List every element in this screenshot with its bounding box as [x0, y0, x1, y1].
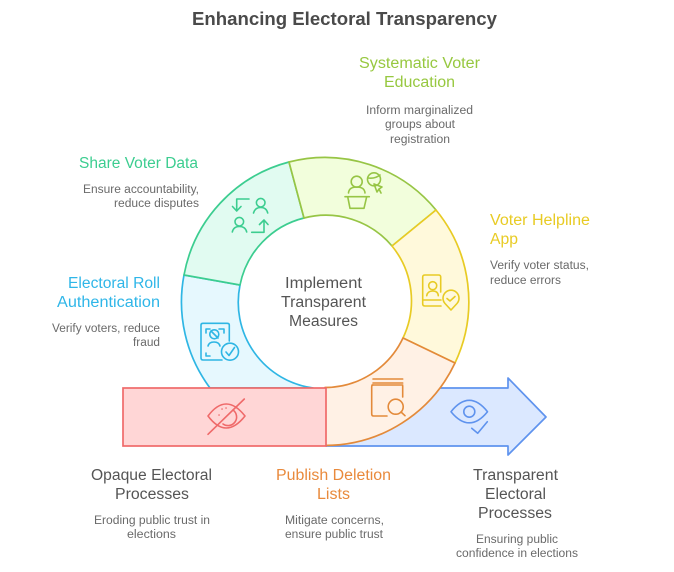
text block: transparent electoral processes: [456, 467, 578, 560]
text block: opaque electoral processes: [91, 467, 212, 541]
segment: voter helpline app: [392, 210, 469, 363]
text block: electoral roll authentication: Authentication: [57, 294, 160, 311]
center label: Implement: [285, 275, 363, 292]
text block: opaque electoral processes: Eroding public trust in: [94, 515, 210, 527]
center label: [281, 275, 367, 330]
panel: opaque processes: [123, 388, 326, 446]
segment: electoral roll authentication: [181, 275, 313, 388]
text block: voter helpline app: Verify voter status,: [490, 260, 589, 272]
arrow: transparent processes: [326, 378, 546, 455]
text block: transparent electoral processes: Electoral: [485, 486, 546, 503]
segment: share voter data: [184, 162, 304, 285]
text block: transparent electoral processes: Ensuring public: [476, 534, 558, 546]
icon: teacher at podium: [345, 173, 382, 208]
text block: electoral roll authentication: Electoral Roll: [68, 275, 160, 292]
text block: systematic voter education: Education: [384, 74, 455, 91]
icon: eye with check: [451, 400, 488, 433]
text block: systematic voter education: registration: [390, 134, 450, 146]
text block: publish deletion lists: Mitigate concerns,: [285, 515, 384, 527]
text block: publish deletion lists: ensure public trust: [285, 529, 384, 541]
text block: systematic voter education: [359, 55, 480, 146]
center label: Measures: [289, 313, 358, 330]
text block: share voter data: Ensure accountability,: [83, 184, 199, 196]
ring diagram: [181, 157, 469, 446]
text block: share voter data: Share Voter Data: [79, 155, 198, 172]
text block: systematic voter education: Systematic Voter: [359, 55, 480, 72]
text block: share voter data: [79, 155, 199, 210]
text block: systematic voter education: Inform marginalized: [366, 105, 473, 117]
text block: voter helpline app: [490, 212, 590, 287]
text block: opaque electoral processes: elections: [127, 529, 176, 541]
icon: phone profile with shield: [423, 275, 459, 310]
text block: voter helpline app: App: [490, 231, 518, 248]
text block: publish deletion lists: Publish Deletion: [276, 467, 391, 484]
text block: transparent electoral processes: Processes: [478, 505, 552, 522]
text block: publish deletion lists: Lists: [317, 486, 350, 503]
text block: opaque electoral processes: Processes: [115, 486, 189, 503]
text block: share voter data: reduce disputes: [114, 198, 199, 210]
text block: voter helpline app: reduce errors: [490, 275, 561, 287]
icon: face scan with check: [201, 323, 238, 360]
text block: electoral roll authentication: [52, 275, 160, 349]
text block: voter helpline app: Voter Helpline: [490, 212, 590, 229]
title: Enhancing Electoral Transparency: [192, 9, 497, 29]
text block: systematic voter education: groups about: [385, 119, 456, 131]
center label: Transparent: [281, 294, 367, 311]
text block: publish deletion lists: [276, 467, 391, 541]
icon: book and magnifier: [372, 379, 405, 416]
text block: transparent electoral processes: confidence in elections: [456, 548, 578, 560]
segment: systematic voter education: [289, 157, 436, 246]
icon: people exchanging data: [232, 198, 268, 232]
segment: publish deletion lists: [325, 338, 455, 446]
text block: opaque electoral processes: Opaque Electoral: [91, 467, 212, 484]
icon: crossed eye: [208, 399, 245, 434]
text block: electoral roll authentication: fraud: [133, 337, 160, 349]
text block: transparent electoral processes: Transparent: [473, 467, 559, 484]
text block: electoral roll authentication: Verify voters, reduce: [52, 323, 160, 335]
